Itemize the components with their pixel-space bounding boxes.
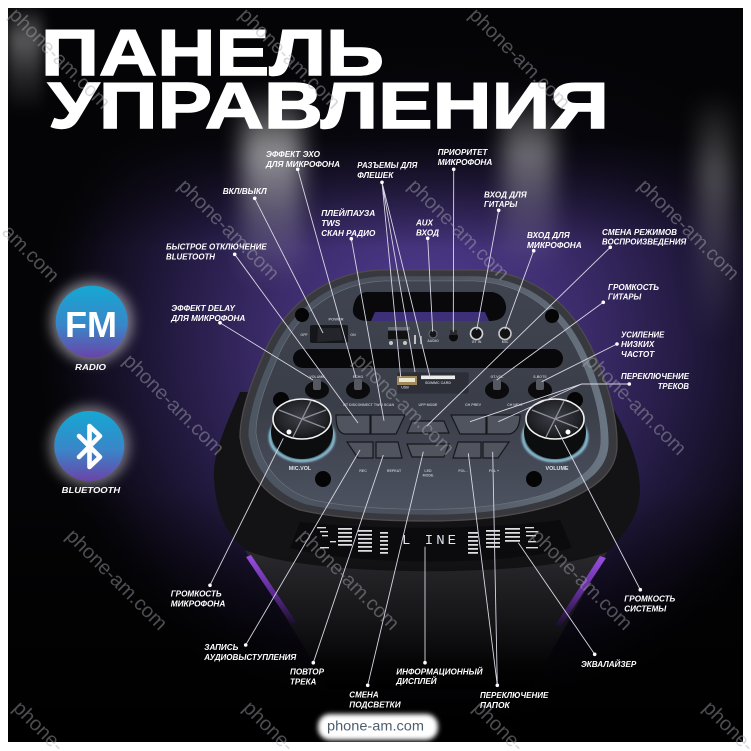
site badge: phone-am.com: phone-am.com	[327, 718, 424, 734]
label: microphone volume: ГРОМКОСТЬ	[171, 588, 222, 598]
label: information display	[395, 666, 483, 686]
label: flash drive ports: РАЗЪЕМЫ ДЛЯ	[357, 160, 418, 170]
label: system volume: ГРОМКОСТЬ	[624, 594, 675, 604]
USB and card reader	[397, 372, 469, 394]
label: microphone volume: МИКРОФОНА	[171, 598, 225, 608]
label: echo effect: ДЛЯ МИКРОФОНА	[265, 159, 340, 169]
button captions: MODE	[423, 474, 434, 478]
button captions: REC	[359, 469, 367, 473]
button captions: REPEAT	[387, 469, 402, 473]
leader: playback mode	[427, 246, 612, 426]
leader: microphone input	[505, 249, 536, 329]
watermarks: phone-am.com	[61, 525, 171, 635]
carrying handle	[353, 292, 506, 321]
button captions: FOL -	[458, 469, 468, 473]
label: microphone volume	[171, 588, 225, 608]
icon: Bluetooth	[49, 406, 129, 486]
leader: AUX input	[426, 236, 433, 332]
label: guitar input: ВХОД ДЛЯ	[484, 190, 527, 200]
site badge: phone-am.com	[8, 714, 743, 751]
left big knob: MIC.VOL	[270, 399, 334, 472]
label: microphone priority	[438, 147, 492, 167]
speaker cabinet	[214, 390, 640, 690]
label: delay effect: ДЛЯ МИКРОФОНА	[170, 313, 245, 323]
label: backlight mode: ПОДСВЕТКИ	[349, 700, 401, 710]
label: system volume: СИСТЕМЫ	[624, 604, 667, 614]
label: microphone priority: МИКРОФОНА	[438, 157, 492, 167]
leader: microphone volume	[208, 438, 283, 587]
label: folder switching: ПАПОК	[480, 700, 510, 710]
input sockets: MIC	[502, 340, 509, 344]
label: echo effect: ЭФФЕКТ ЭХО	[266, 149, 320, 159]
power switch: POWER	[328, 316, 344, 322]
label: BLUETOOTH: BLUETOOTH	[62, 485, 121, 495]
leader: track switching	[470, 382, 631, 422]
label: guitar input	[484, 190, 527, 209]
label: play pause: ПЛЕЙ/ПАУЗА	[321, 207, 375, 218]
label: AUX input: AUX	[415, 218, 434, 228]
label: equalizer: ЭКВАЛАЙЗЕР	[581, 658, 637, 669]
leader: audio recording	[244, 450, 360, 647]
label: track switching	[621, 371, 689, 391]
label: play pause: TWS	[321, 218, 341, 228]
label: playback mode	[602, 227, 687, 246]
icon: FM radio	[51, 281, 133, 363]
right big knob: VOLUME: VOLUME	[545, 466, 569, 472]
label: system volume	[624, 594, 675, 614]
small knobs: VOLUME	[309, 375, 325, 379]
leader: microphone priority	[452, 168, 456, 332]
watermarks: phone-am.com	[348, 350, 458, 460]
watermarks: phone-am.com	[234, 4, 344, 114]
label: Bluetooth disconnect	[166, 242, 267, 262]
small knobs: S.BOTS	[533, 375, 547, 379]
button captions: LED	[424, 469, 432, 473]
small knobs: GT.VOL	[491, 375, 504, 379]
small knobs: CH NEXT	[507, 403, 524, 407]
label: track switching: ТРЕКОВ	[658, 381, 689, 391]
display with equalizer and LINE readout: L INE	[402, 533, 459, 549]
speaker grille	[245, 550, 607, 690]
leader: guitar volume	[497, 300, 605, 380]
label: audio recording: АУДИОВЫСТУПЛЕНИЯ	[203, 652, 297, 662]
label: RADIO: RADIO	[75, 362, 106, 372]
leader: information display	[423, 547, 427, 664]
watermarks: phone-am.com	[173, 175, 283, 285]
title	[41, 16, 609, 142]
label: bass boost	[621, 330, 665, 359]
watermarks: phone-am.com	[118, 350, 228, 460]
button captions	[359, 469, 499, 478]
watermarks: phone-am.com	[464, 4, 574, 114]
right big knob: VOLUME	[523, 399, 587, 472]
label: power switch: ВКЛ/ВЫКЛ	[223, 186, 268, 196]
label: play pause: СКАН РАДИО	[321, 228, 376, 238]
label: play pause	[321, 207, 376, 238]
label: backlight mode	[349, 690, 401, 710]
leader: Bluetooth disconnect	[233, 252, 358, 423]
watermarks: phone-am.com	[403, 175, 513, 285]
small knobs: BT DISCONNECT	[343, 403, 374, 407]
input sockets: GT IN	[472, 340, 482, 344]
label: track repeat	[290, 666, 324, 686]
label: folder switching	[480, 690, 549, 710]
label: microphone input	[527, 230, 582, 250]
button cluster	[336, 415, 520, 458]
label: track repeat: ПОВТОР	[290, 666, 324, 676]
input sockets	[388, 327, 511, 345]
watermarks: phone-am.com	[4, 4, 114, 114]
label: guitar volume: ГРОМКОСТЬ	[608, 282, 659, 292]
control panel plate	[240, 270, 617, 521]
leader: power switch	[253, 196, 323, 333]
left big knob: MIC.VOL: MIC.VOL	[289, 466, 312, 472]
label: track repeat: ТРЕКА	[290, 676, 316, 686]
USB and card reader: USB	[401, 386, 409, 390]
label: AUX input	[415, 218, 439, 238]
display with equalizer and LINE readout	[290, 520, 572, 562]
input sockets: AUDIO	[427, 339, 439, 343]
label: bass boost: НИЗКИХ	[621, 339, 655, 349]
label: microphone priority: ПРИОРИТЕТ	[438, 147, 488, 157]
USB and card reader: SD/MMC CARD	[425, 381, 451, 385]
title: ПАНЕЛЬ	[41, 16, 384, 89]
power switch: ON	[350, 333, 356, 337]
front slot	[293, 349, 563, 368]
leader: backlight mode	[366, 452, 423, 687]
label: microphone input: ВХОД ДЛЯ	[527, 230, 570, 240]
label: playback mode: ВОСПРОИЗВЕДЕНИЯ	[602, 236, 687, 246]
label: AUX input: ВХОД	[416, 228, 439, 238]
label: Bluetooth disconnect: БЫСТРОЕ ОТКЛЮЧЕНИЕ	[166, 242, 267, 252]
label: information display: ИНФОРМАЦИОННЫЙ	[396, 666, 483, 676]
leader: flash drive ports	[380, 180, 430, 377]
screw holes	[273, 308, 583, 487]
small knobs: CH PREV	[465, 403, 482, 407]
watermarks: phone-am.com	[293, 525, 403, 635]
leader: track repeat	[312, 455, 383, 664]
label: bass boost: УСИЛЕНИЕ	[621, 330, 665, 340]
small knobs: TWS/ SCAN	[374, 403, 394, 407]
label: guitar volume	[608, 282, 659, 302]
icon: FM radio: FM	[65, 304, 117, 345]
leader: equalizer	[518, 543, 596, 656]
left purple light strip	[246, 555, 296, 626]
leader: guitar input	[477, 208, 501, 330]
label: microphone input: МИКРОФОНА	[527, 240, 582, 250]
label: backlight mode: СМЕНА	[349, 690, 379, 700]
small knobs: ECHO	[353, 375, 363, 379]
title: УПРАВЛЕНИЯ	[48, 69, 609, 142]
leader: play pause	[350, 237, 384, 421]
label: guitar volume: ГИТАРЫ	[608, 292, 642, 302]
power switch	[300, 316, 356, 343]
watermarks: phone-am.com	[633, 175, 743, 285]
label: audio recording: ЗАПИСЬ	[204, 642, 238, 652]
watermarks: phone-am.com	[526, 525, 636, 635]
label: Bluetooth disconnect: BLUETOOTH	[166, 252, 216, 262]
label: delay effect	[170, 303, 245, 323]
label: audio recording	[203, 642, 297, 662]
leader: system volume	[555, 425, 642, 592]
label: guitar input: ГИТАРЫ	[484, 199, 518, 209]
leader: bass boost	[542, 342, 619, 382]
leader: delay effect	[218, 321, 313, 380]
label: bass boost: ЧАСТОТ	[621, 349, 655, 359]
small knobs: UFP MODE	[419, 403, 438, 407]
speaker: control panel and cabinet	[214, 270, 640, 690]
label: flash drive ports	[357, 160, 418, 180]
label: delay effect: ЭФФЕКТ DELAY	[171, 303, 236, 313]
label: information display: ДИСПЛЕЙ	[395, 675, 437, 686]
watermarks: phone-am.com	[580, 350, 690, 460]
label: playback mode: СМЕНА РЕЖИМОВ	[602, 227, 677, 237]
label: flash drive ports: ФЛЕШЕК	[357, 170, 394, 180]
label: folder switching: ПЕРЕКЛЮЧЕНИЕ	[480, 690, 549, 700]
small knobs	[305, 375, 552, 407]
label: track switching: ПЕРЕКЛЮЧЕНИЕ	[621, 371, 689, 381]
right purple light strip	[556, 556, 606, 628]
leader: echo effect	[296, 168, 356, 378]
leader: folder switching	[468, 452, 499, 687]
label: echo effect	[265, 149, 340, 169]
power switch: OFF	[300, 333, 308, 337]
button captions: FOL +	[489, 469, 499, 473]
